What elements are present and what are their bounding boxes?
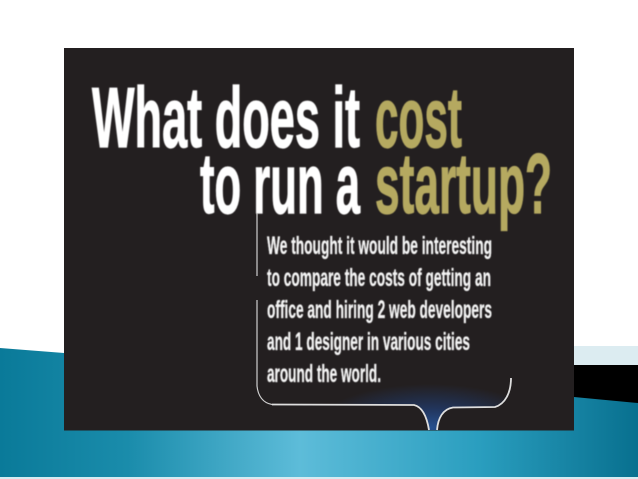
speech bubble [257, 213, 511, 430]
panel: dark title card [64, 48, 574, 430]
intro text [267, 232, 492, 388]
intro text: and 1 designer in various cities [267, 328, 470, 356]
title: to run a [200, 137, 360, 232]
title [92, 71, 552, 232]
slide background: teal wave [0, 346, 638, 479]
title: What does it [92, 71, 360, 166]
title: cost [375, 71, 462, 166]
intro text: around the world. [267, 360, 381, 388]
